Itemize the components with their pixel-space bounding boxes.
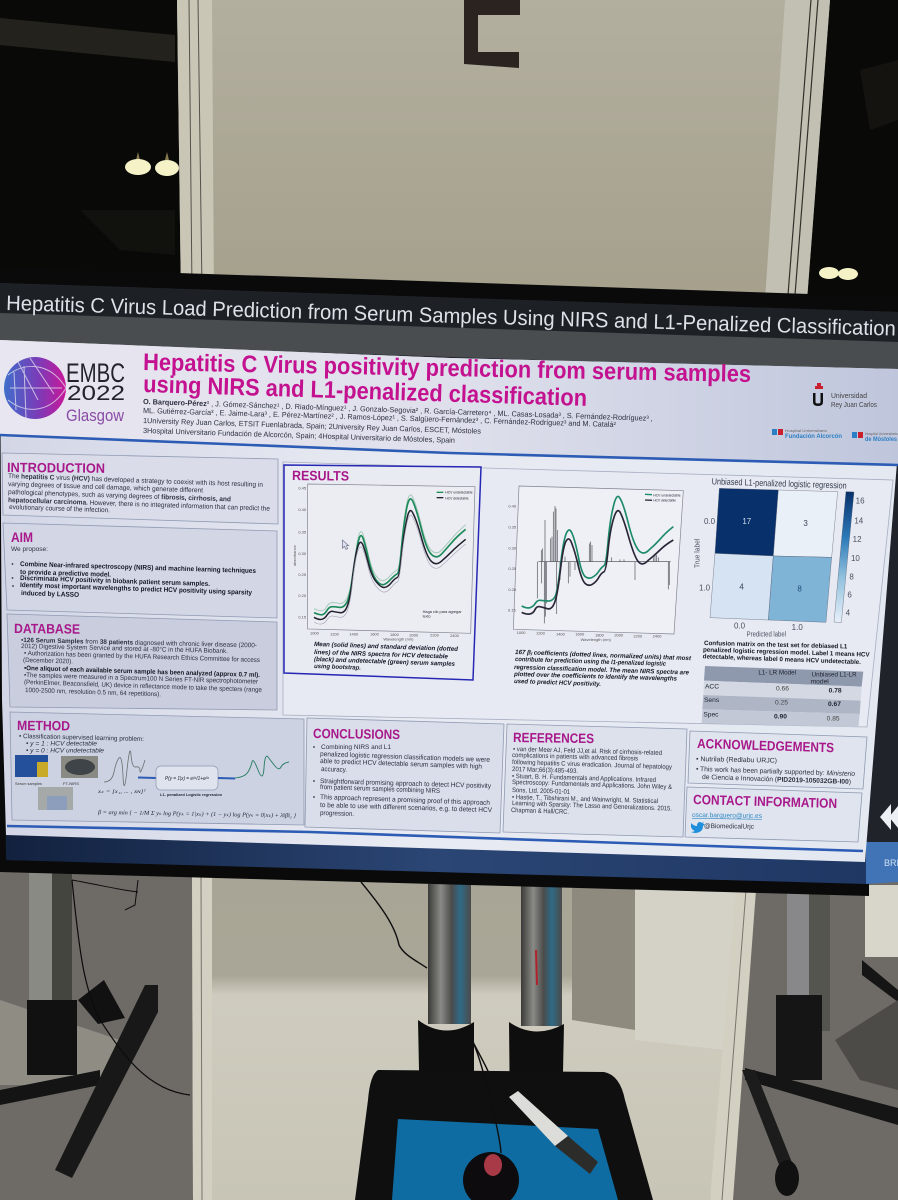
panel: references: • Hastie, T., Tibshirani M., and Wainwright, M. Statistical bbox=[512, 794, 659, 805]
large black letter on wall bbox=[464, 0, 520, 68]
legend: HCV undetectable bbox=[653, 494, 681, 498]
matrix values: 17 bbox=[742, 517, 752, 526]
y axis labels: 0.30 bbox=[298, 551, 307, 556]
model box bbox=[156, 766, 218, 790]
panel: aim: Discriminate HCV positivity in biobank patient serum samples. bbox=[20, 575, 210, 588]
arrow out of model bbox=[218, 777, 235, 780]
x axis labels: 1400 bbox=[556, 631, 566, 636]
x axis labels: 2400 bbox=[653, 634, 662, 639]
panel: database: (December 2020). bbox=[23, 657, 73, 665]
panel: aim: induced by LASSO bbox=[21, 590, 79, 599]
results caption: Mean (solid lines) and standard deviation (dotted bbox=[314, 641, 458, 653]
poster title: Hepatitis C Virus positivity prediction from serum samples bbox=[143, 349, 751, 388]
x axis labels: 1200 bbox=[536, 631, 546, 636]
Hospital de Móstoles logo bbox=[852, 432, 898, 443]
panel: database: •One aliquot of each available serum sample has been analyzed (approx 0.7 ml). bbox=[24, 665, 260, 679]
chart: confusion matrix bbox=[693, 476, 870, 727]
matrix axes: 0.0 bbox=[734, 622, 746, 631]
coefficients caption: used to predict HCV positivity. bbox=[514, 678, 601, 688]
matrix axes: 1.0 bbox=[792, 623, 803, 632]
y axis labels: 0.35 bbox=[508, 525, 517, 530]
lab equipment photo bbox=[38, 787, 73, 810]
green upper deviation band bbox=[314, 495, 466, 611]
coefficients caption: plotted over the coefficients to identify the wavelengths bbox=[513, 671, 678, 683]
panel: conclusions bbox=[305, 718, 504, 833]
panel: conclusions: This approach represent a promising proof of this approach bbox=[320, 794, 490, 807]
x axis labels bbox=[517, 630, 662, 642]
y axis labels: 0.35 bbox=[298, 529, 307, 534]
black curve bbox=[522, 511, 673, 614]
x axis labels: 2200 bbox=[430, 633, 440, 638]
panel: method bbox=[10, 712, 304, 825]
matrix values: 8 bbox=[797, 584, 802, 593]
matrix axes: Predicted label bbox=[747, 629, 786, 638]
matrix axes: 0.0 bbox=[704, 517, 716, 526]
right monitor stand bbox=[742, 893, 898, 1196]
poster title bbox=[143, 349, 751, 412]
background: ceiling bbox=[0, 0, 898, 300]
metrics table: Spec bbox=[703, 711, 719, 718]
chart: mean NIRS spectra bbox=[292, 484, 475, 642]
panel: introduction: varying degrees of tissue and cell damage, which generate different bbox=[8, 481, 203, 494]
screen bottom band bbox=[6, 830, 866, 884]
matrix axes: 1.0 bbox=[699, 584, 711, 593]
left monitor stand bbox=[0, 873, 190, 1178]
panel: conclusions: Combining NIRS and L1 bbox=[321, 744, 391, 751]
panel: conclusions: accuracy. bbox=[321, 766, 347, 774]
x axis labels: 1000 bbox=[517, 630, 526, 635]
panel: references: REFERENCES bbox=[513, 730, 594, 746]
panel: conclusions: CONCLUSIONS bbox=[313, 726, 400, 742]
panel: references: Learning with Sparsity: The Lasso and Generalizations. 2015. bbox=[512, 800, 672, 813]
confusion caption: Confusion matrix on the test set for debiased L1 bbox=[704, 640, 848, 650]
panel: database: 2012) Digestive System Service and stored at -80°C in the HUFA Biobank. bbox=[21, 642, 228, 655]
panel: method: • y = 1 : HCV detectable bbox=[26, 740, 97, 748]
computer mouse bbox=[463, 1040, 519, 1200]
colour bar ticks bbox=[846, 497, 865, 617]
colour bar ticks: 8 bbox=[849, 572, 854, 581]
panel: references: following hepatitis C virus eradication. Journal of hepatology bbox=[512, 759, 673, 771]
EMBC 2022 logo: EMBC bbox=[66, 358, 125, 388]
y axis labels: 0.20 bbox=[508, 587, 517, 592]
x axis labels: 1600 bbox=[575, 632, 585, 637]
y axis labels: 0.15 bbox=[298, 614, 307, 619]
authors and affiliations bbox=[143, 397, 653, 445]
colour bar ticks: 12 bbox=[853, 535, 862, 544]
y axis labels bbox=[508, 503, 517, 613]
panel: introduction: evolutionary course of the infection. bbox=[9, 504, 110, 514]
panel: references bbox=[503, 724, 687, 837]
coefficients caption: 167 βⱼ coefficients (dotted lines, normalized units) that most bbox=[515, 649, 692, 662]
serum samples photo: Serum samples bbox=[15, 782, 42, 786]
authors and affiliations: 3Hospital Universitario Fundación de Alcorcón, Spain; 4Hospital Universitario de Móstoles, Spain bbox=[143, 426, 455, 445]
x axis labels bbox=[310, 631, 460, 642]
ceiling lights, right bbox=[819, 267, 858, 280]
equation beta: β = arg min { − 1/M Σ yₖ log P(yₖ = 1|xₖ) + (1 − yₖ) log P(yₖ = 0|xₖ) + λ‖β‖₁ } bbox=[97, 809, 297, 819]
metrics table: 0.25 bbox=[775, 700, 788, 707]
legend bbox=[645, 494, 681, 503]
colour bar ticks: 10 bbox=[851, 554, 860, 563]
model label: L1- penalized Logistic regression bbox=[160, 793, 223, 797]
matrix title: Unbiased L1-penalized logistic regression bbox=[712, 476, 847, 491]
confusion caption: detectable, whereas label 0 means HCV undetectable. bbox=[703, 653, 861, 666]
panel: acknowledgements: ACKNOWLEDGEMENTS bbox=[697, 736, 834, 755]
confusion caption bbox=[703, 640, 870, 666]
panel: aim: We propose: bbox=[11, 546, 48, 553]
authors and affiliations: ML. Gutiérrez-García³ , E. Jaime-Lara³ , E. Pérez-Martínez² , J. Ramos-López¹ , S. Salgüero-Fernández³ , C. Fernández-Rodríguez³ and M. Catalá² bbox=[143, 406, 616, 429]
y axis labels: 0.30 bbox=[508, 545, 517, 550]
panel: database: DATABASE bbox=[14, 621, 80, 637]
slide navigation side area bbox=[866, 804, 898, 884]
panel: conclusions: Straightforward promising approach to detect HCV positivity bbox=[320, 778, 492, 790]
green curve bbox=[522, 496, 673, 608]
Hospital Fundación Alcorcón logo: Fundación Alcorcón bbox=[785, 434, 842, 440]
x axis labels: 2000 bbox=[409, 632, 419, 637]
x axis labels: Wavelength (nm) bbox=[581, 637, 612, 642]
monitor bezel bbox=[0, 267, 898, 896]
x axis labels: 1400 bbox=[349, 631, 359, 636]
panel: acknowledgements: • Nutrilab (Redlabu URJC) bbox=[696, 756, 777, 765]
results caption: lines) of the NIRS spectra for HCV detectable bbox=[314, 649, 449, 660]
coefficients caption: regression classification model. The mean NIRS spectra are bbox=[514, 664, 690, 677]
panel: conclusions: from patient serum samples combining NIRS bbox=[320, 784, 441, 795]
panel: method: METHOD bbox=[17, 718, 70, 733]
panel: references: 2017 Mar;66(3):485-493. bbox=[512, 766, 578, 775]
colour bar ticks: 4 bbox=[846, 608, 851, 617]
panel: contact information: oscar.barquero@urjc.es bbox=[692, 812, 763, 820]
Hospital de Móstoles logo: Hospital Universitario bbox=[865, 432, 898, 436]
panel: introduction: The hepatitis C virus (HCV) has developed a strategy to coexist with its host resulting in bbox=[8, 473, 263, 489]
model box: P(y = 1|x) = eᵝˣ/1+eᵝˣ bbox=[165, 776, 209, 782]
panel: results highlighted box bbox=[284, 465, 481, 680]
black lower deviation band bbox=[314, 515, 466, 624]
legend: HCV detectable bbox=[653, 499, 676, 503]
x axis labels: 2200 bbox=[633, 633, 643, 638]
placeholder text: Haga clic para agregar bbox=[423, 610, 462, 614]
panel: references: • van der Meer AJ, Feld JJ,et al. Risk of cirrhosis-related bbox=[513, 746, 662, 757]
header rule bbox=[0, 435, 898, 465]
y axis labels: 0.15 bbox=[508, 608, 517, 613]
panel: references: Spectroscopy: Fundamentals and Applications. John Wiley & bbox=[512, 779, 673, 791]
Universidad Rey Juan Carlos logo: Rey Juan Carlos bbox=[831, 400, 877, 409]
metrics table: 0.78 bbox=[829, 688, 842, 695]
confusion caption: penalized logistic regression model. Label 1 means HCV bbox=[703, 647, 870, 659]
panel: aim: to provide a predictive model. bbox=[20, 569, 111, 579]
matrix axes: True label bbox=[693, 538, 702, 568]
matrix values: 4 bbox=[739, 582, 744, 591]
FT-NIRS photo: FT-NIRS bbox=[63, 782, 80, 786]
panel: acknowledgements bbox=[688, 731, 867, 789]
panel: database: (PerkinElmer, Beaconsfield, UK) device in reflectance mode to take the specters (range bbox=[24, 679, 262, 694]
panel: method: • Classification supervised learning problem: bbox=[19, 733, 144, 743]
y axis labels: absorbance bbox=[292, 544, 297, 566]
EMBC 2022 logo: Glasgow bbox=[66, 406, 125, 425]
x axis labels: 2000 bbox=[614, 633, 624, 638]
central stand poles bbox=[418, 884, 564, 1120]
Universidad Rey Juan Carlos logo bbox=[813, 383, 877, 409]
colour bar ticks: 14 bbox=[854, 516, 864, 525]
panel: references: Chapman & Hall/CRC. bbox=[511, 807, 569, 816]
legend: HCV detectable bbox=[445, 496, 469, 500]
matrix values: 3 bbox=[803, 519, 808, 528]
y axis labels: 0.45 bbox=[298, 485, 307, 490]
y axis labels: 0.40 bbox=[298, 507, 307, 512]
authors and affiliations: O. Barquero-Pérez¹ , J. Gómez-Sánchez¹ , D. Riado-Mínguez¹ , J. Gonzalo-Segovia² , R. García-Carretero⁴ , ML. Casas-Losada³ , S. Fernández-Rodríguez³ , bbox=[143, 397, 653, 423]
panel: introduction bbox=[2, 453, 278, 524]
panel: conclusions: progression. bbox=[320, 810, 354, 818]
monitor screen bbox=[0, 283, 898, 882]
panel: conclusions: able to predict HCV detectable serum samples with high bbox=[320, 758, 482, 771]
panel: results section frame bbox=[283, 462, 893, 727]
icon: twitter bird bbox=[691, 822, 705, 833]
arrow into model bbox=[138, 776, 156, 779]
metrics table: 0.66 bbox=[776, 686, 789, 693]
Universidad Rey Juan Carlos logo: Universidad bbox=[831, 391, 867, 400]
EMBC 2022 logo bbox=[4, 357, 125, 425]
authors and affiliations: 1University Rey Juan Carlos, ETSIT Fuenlabrada, Spain; 2University Rey Juan Carlos, ESCET, Móstoles bbox=[143, 416, 481, 436]
panel: acknowledgements: • This work has been partially supported by: Ministerio bbox=[696, 766, 855, 778]
poster sheet bbox=[0, 340, 898, 862]
colour bar ticks: 16 bbox=[856, 497, 865, 506]
panel: method: • y = 0 : HCV undetectable bbox=[26, 748, 104, 755]
Hospital Fundación Alcorcón logo: Hospital Universitario bbox=[785, 429, 827, 433]
panel: database: •The samples were measured in a Spectrum100 N Series FT-NIR spectrophotometer bbox=[24, 672, 259, 686]
metrics table: 0.85 bbox=[827, 715, 840, 722]
metrics table: 0.67 bbox=[828, 701, 841, 708]
panel: conclusions: penalized logistic regression classification models we were bbox=[320, 751, 490, 764]
mouse cursor bbox=[342, 540, 349, 549]
legend: HCV undetectable bbox=[445, 491, 473, 495]
metrics table: Sens bbox=[704, 697, 720, 704]
twitter handle: @BiomedicalUrjc bbox=[704, 823, 755, 831]
matrix axes bbox=[693, 517, 803, 638]
x axis labels: 1200 bbox=[330, 631, 340, 636]
Hospital Fundación Alcorcón logo bbox=[772, 429, 842, 440]
colour bar ticks: 6 bbox=[847, 591, 852, 600]
metrics table: model bbox=[811, 678, 829, 685]
x axis labels: 1000 bbox=[310, 631, 320, 636]
metrics table: ACC bbox=[705, 683, 719, 690]
x axis labels: Wavelength (nm) bbox=[383, 637, 414, 642]
y axis labels bbox=[292, 485, 307, 619]
stand base table bbox=[355, 1070, 653, 1200]
results caption bbox=[314, 641, 458, 672]
results caption: (black) and undetectable (green) serum samples bbox=[314, 656, 456, 668]
coefficients caption: contribute for prediction using the l1-penalized logistic bbox=[515, 656, 667, 668]
panel: references: Sons, Ltd. 2005-01-01 bbox=[512, 787, 570, 796]
panel: contact information bbox=[685, 787, 862, 842]
lower background: floor and wall bbox=[0, 860, 898, 1200]
metrics table: 0.90 bbox=[774, 713, 787, 720]
chart: coefficients over spectra bbox=[508, 486, 683, 642]
blue mouse mat bbox=[392, 1119, 618, 1200]
y axis labels: 0.20 bbox=[298, 593, 307, 598]
upper white exhibition wall bbox=[177, 0, 830, 300]
y axis labels: 0.40 bbox=[508, 503, 517, 508]
x axis labels: 1800 bbox=[595, 632, 605, 637]
EMBC 2022 logo: 2022 bbox=[67, 382, 125, 405]
panel: database: •126 Serum Samples from 38 patients diagnosed with chronic liver disease (2000- bbox=[21, 637, 257, 649]
panel: aim: Combine Near-infrared spectroscopy (NIRS) and machine learning techniques bbox=[20, 561, 256, 575]
FT-NIRS photo bbox=[61, 756, 98, 786]
panel: database: • Authorization has been granted by the HUFA Research Ethics Committee for access bbox=[24, 650, 261, 664]
poster title: using NIRS and L1-penalized classification bbox=[143, 371, 587, 412]
y axis labels: 0.25 bbox=[298, 572, 307, 577]
x axis labels: 1600 bbox=[370, 632, 380, 637]
beta coefficient stems bbox=[537, 506, 671, 623]
metrics table: Unbiased L1-LR bbox=[812, 672, 857, 679]
panel: aim: Identify most important wavelengths to predict HCV positivity using sparsity bbox=[20, 582, 252, 597]
metrics table bbox=[702, 666, 863, 727]
panel: database: 1000-2500 nm, resolution 0.5 nm, 64 repetitions). bbox=[25, 687, 161, 698]
panel: introduction: hepatocellular carcinoma. However, there is no integrated information that can predict the bbox=[8, 497, 270, 513]
panel: results highlighted box: RESULTS bbox=[292, 468, 349, 484]
cables bbox=[361, 882, 501, 1153]
ceiling lights, left bbox=[125, 152, 179, 176]
metrics table: L1- LR Model bbox=[758, 669, 796, 676]
panel: database bbox=[7, 614, 277, 710]
equation x: xₖ = [x₁, ... , xɴ]ᵀ bbox=[97, 789, 147, 795]
poster header background bbox=[0, 340, 898, 465]
panel: introduction: pathological phenotypes, such as varying degrees of fibrosis, cirrhosis, and bbox=[8, 489, 231, 503]
panel: aim: AIM bbox=[11, 530, 33, 545]
black detectable curve bbox=[314, 511, 466, 619]
panel: references: • Stuart, B. H. Fundamentals and Applications. Infrared bbox=[512, 773, 656, 784]
panel: introduction: INTRODUCTION bbox=[7, 460, 105, 476]
slide title band bbox=[0, 284, 898, 372]
matrix values bbox=[739, 517, 808, 593]
panel: conclusions: to be able to use with different scenarios, e.g. to detect HCV bbox=[320, 802, 493, 814]
placeholder text: texto bbox=[423, 614, 431, 618]
matrix cells bbox=[710, 488, 838, 622]
panel: aim bbox=[3, 523, 277, 618]
serum samples photo bbox=[15, 755, 48, 786]
panel: contact information: CONTACT INFORMATION bbox=[693, 792, 837, 811]
panel: acknowledgements: de Ciencia e Innovación (PID2019-105032GB-I00) bbox=[702, 774, 851, 786]
whiteboard marker bbox=[509, 1091, 598, 1174]
colour bar bbox=[834, 492, 854, 623]
x axis labels: 1800 bbox=[390, 632, 400, 637]
panel: references: complications in patients with advanced fibrosis bbox=[512, 752, 639, 763]
y axis labels: 0.25 bbox=[508, 566, 517, 571]
legend bbox=[437, 491, 473, 500]
green undetectable curve bbox=[314, 499, 466, 615]
filtered spectrum sketch bbox=[235, 756, 289, 778]
x axis labels: 2400 bbox=[450, 633, 460, 638]
placeholder text bbox=[423, 610, 462, 618]
results caption: using bootstrap. bbox=[314, 663, 361, 672]
coefficients caption bbox=[513, 649, 692, 688]
raw spectrum sketch bbox=[104, 751, 145, 786]
footer rule bbox=[7, 826, 863, 851]
